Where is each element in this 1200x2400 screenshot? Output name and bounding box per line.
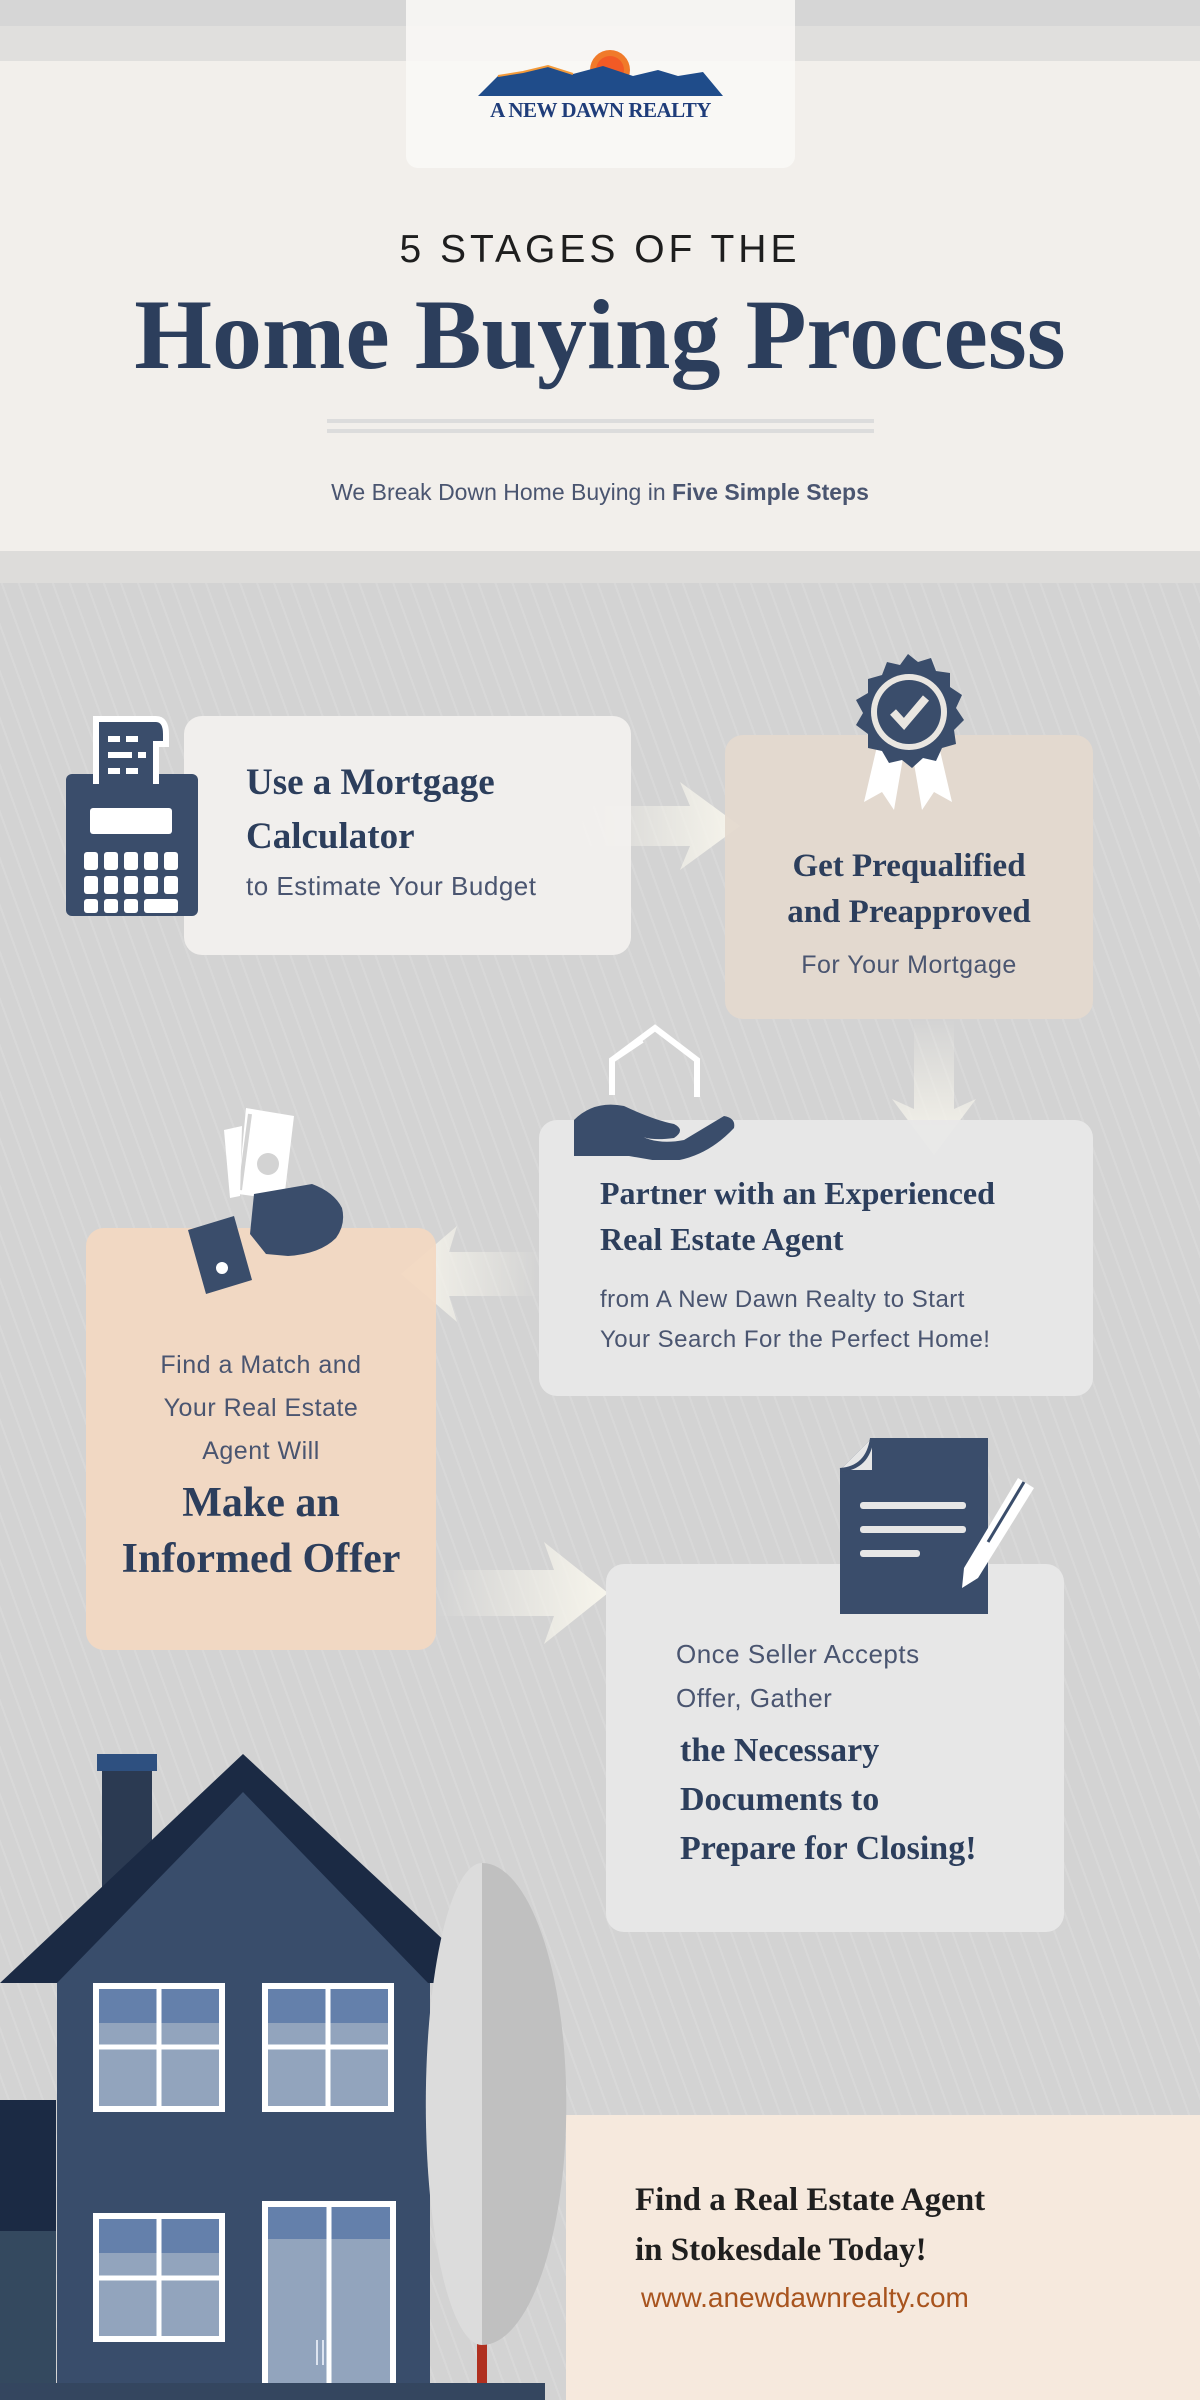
- title: 5 STAGES OF THE: [400, 228, 800, 271]
- icon: hand with money: [188, 1108, 344, 1294]
- step 4 card: [86, 1228, 436, 1650]
- step 3 card: [539, 1120, 1093, 1396]
- icon: badge: [856, 654, 964, 810]
- step 3 card: Your Search For the Perfect Home!: [600, 1326, 990, 1353]
- arrow 1: [631, 782, 725, 870]
- step 2 card: For Your Mortgage: [801, 951, 1017, 979]
- step 5 card: Prepare for Closing!: [680, 1830, 977, 1867]
- icon: document with pen: [840, 1438, 1034, 1614]
- CTA panel: [566, 2115, 1200, 2400]
- step 3 card: from A New Dawn Realty to Start: [600, 1286, 965, 1313]
- step 2 card: Get Prequalified: [792, 848, 1026, 884]
- step 5 card: [606, 1564, 1064, 1932]
- CTA panel: Find a Real Estate Agent: [635, 2182, 985, 2218]
- CTA panel: www.anewdawnrealty.com: [641, 2282, 969, 2313]
- step 1 card: [184, 716, 631, 955]
- title: Home Buying Process: [134, 279, 1066, 390]
- step 5 card: Offer, Gather: [676, 1683, 832, 1713]
- arrow 2 down: [892, 1050, 976, 1120]
- step 3 card: Real Estate Agent: [600, 1221, 844, 1257]
- step 5 card: Documents to: [680, 1781, 879, 1818]
- step 1 card: to Estimate Your Budget: [246, 871, 536, 901]
- CTA panel: in Stokesdale Today!: [635, 2232, 927, 2268]
- step 1 card: Calculator: [246, 816, 415, 857]
- step 1 card: Use a Mortgage: [246, 762, 495, 803]
- step 4 card: Find a Match and: [160, 1351, 362, 1379]
- icon: logo mountains: [478, 50, 723, 96]
- subtitle: We Break Down Home Buying in Five Simple Steps: [331, 479, 869, 505]
- illustration: house and tree: [0, 1754, 566, 2400]
- header band: [0, 26, 1200, 583]
- logo card: [406, 0, 795, 168]
- arrow 4 right: [474, 1542, 606, 1644]
- step 5 card: the Necessary: [680, 1732, 879, 1769]
- logo text: A NEW DAWN REALTY: [490, 98, 711, 122]
- step 2 card: [725, 735, 1093, 1019]
- step 5 card: Once Seller Accepts: [676, 1639, 920, 1669]
- arrow 3 left: [436, 1226, 510, 1322]
- step 4 card: Your Real Estate: [164, 1394, 358, 1422]
- icon: hand with house: [574, 1024, 734, 1160]
- title: [134, 228, 1066, 390]
- step 3 card: Partner with an Experienced: [600, 1175, 995, 1211]
- step 2 card: and Preapproved: [787, 894, 1031, 930]
- step 4 card: Informed Offer: [122, 1536, 400, 1582]
- step 4 card: Make an: [182, 1480, 340, 1526]
- icon: calculator: [66, 716, 198, 916]
- step 4 card: Agent Will: [202, 1437, 320, 1465]
